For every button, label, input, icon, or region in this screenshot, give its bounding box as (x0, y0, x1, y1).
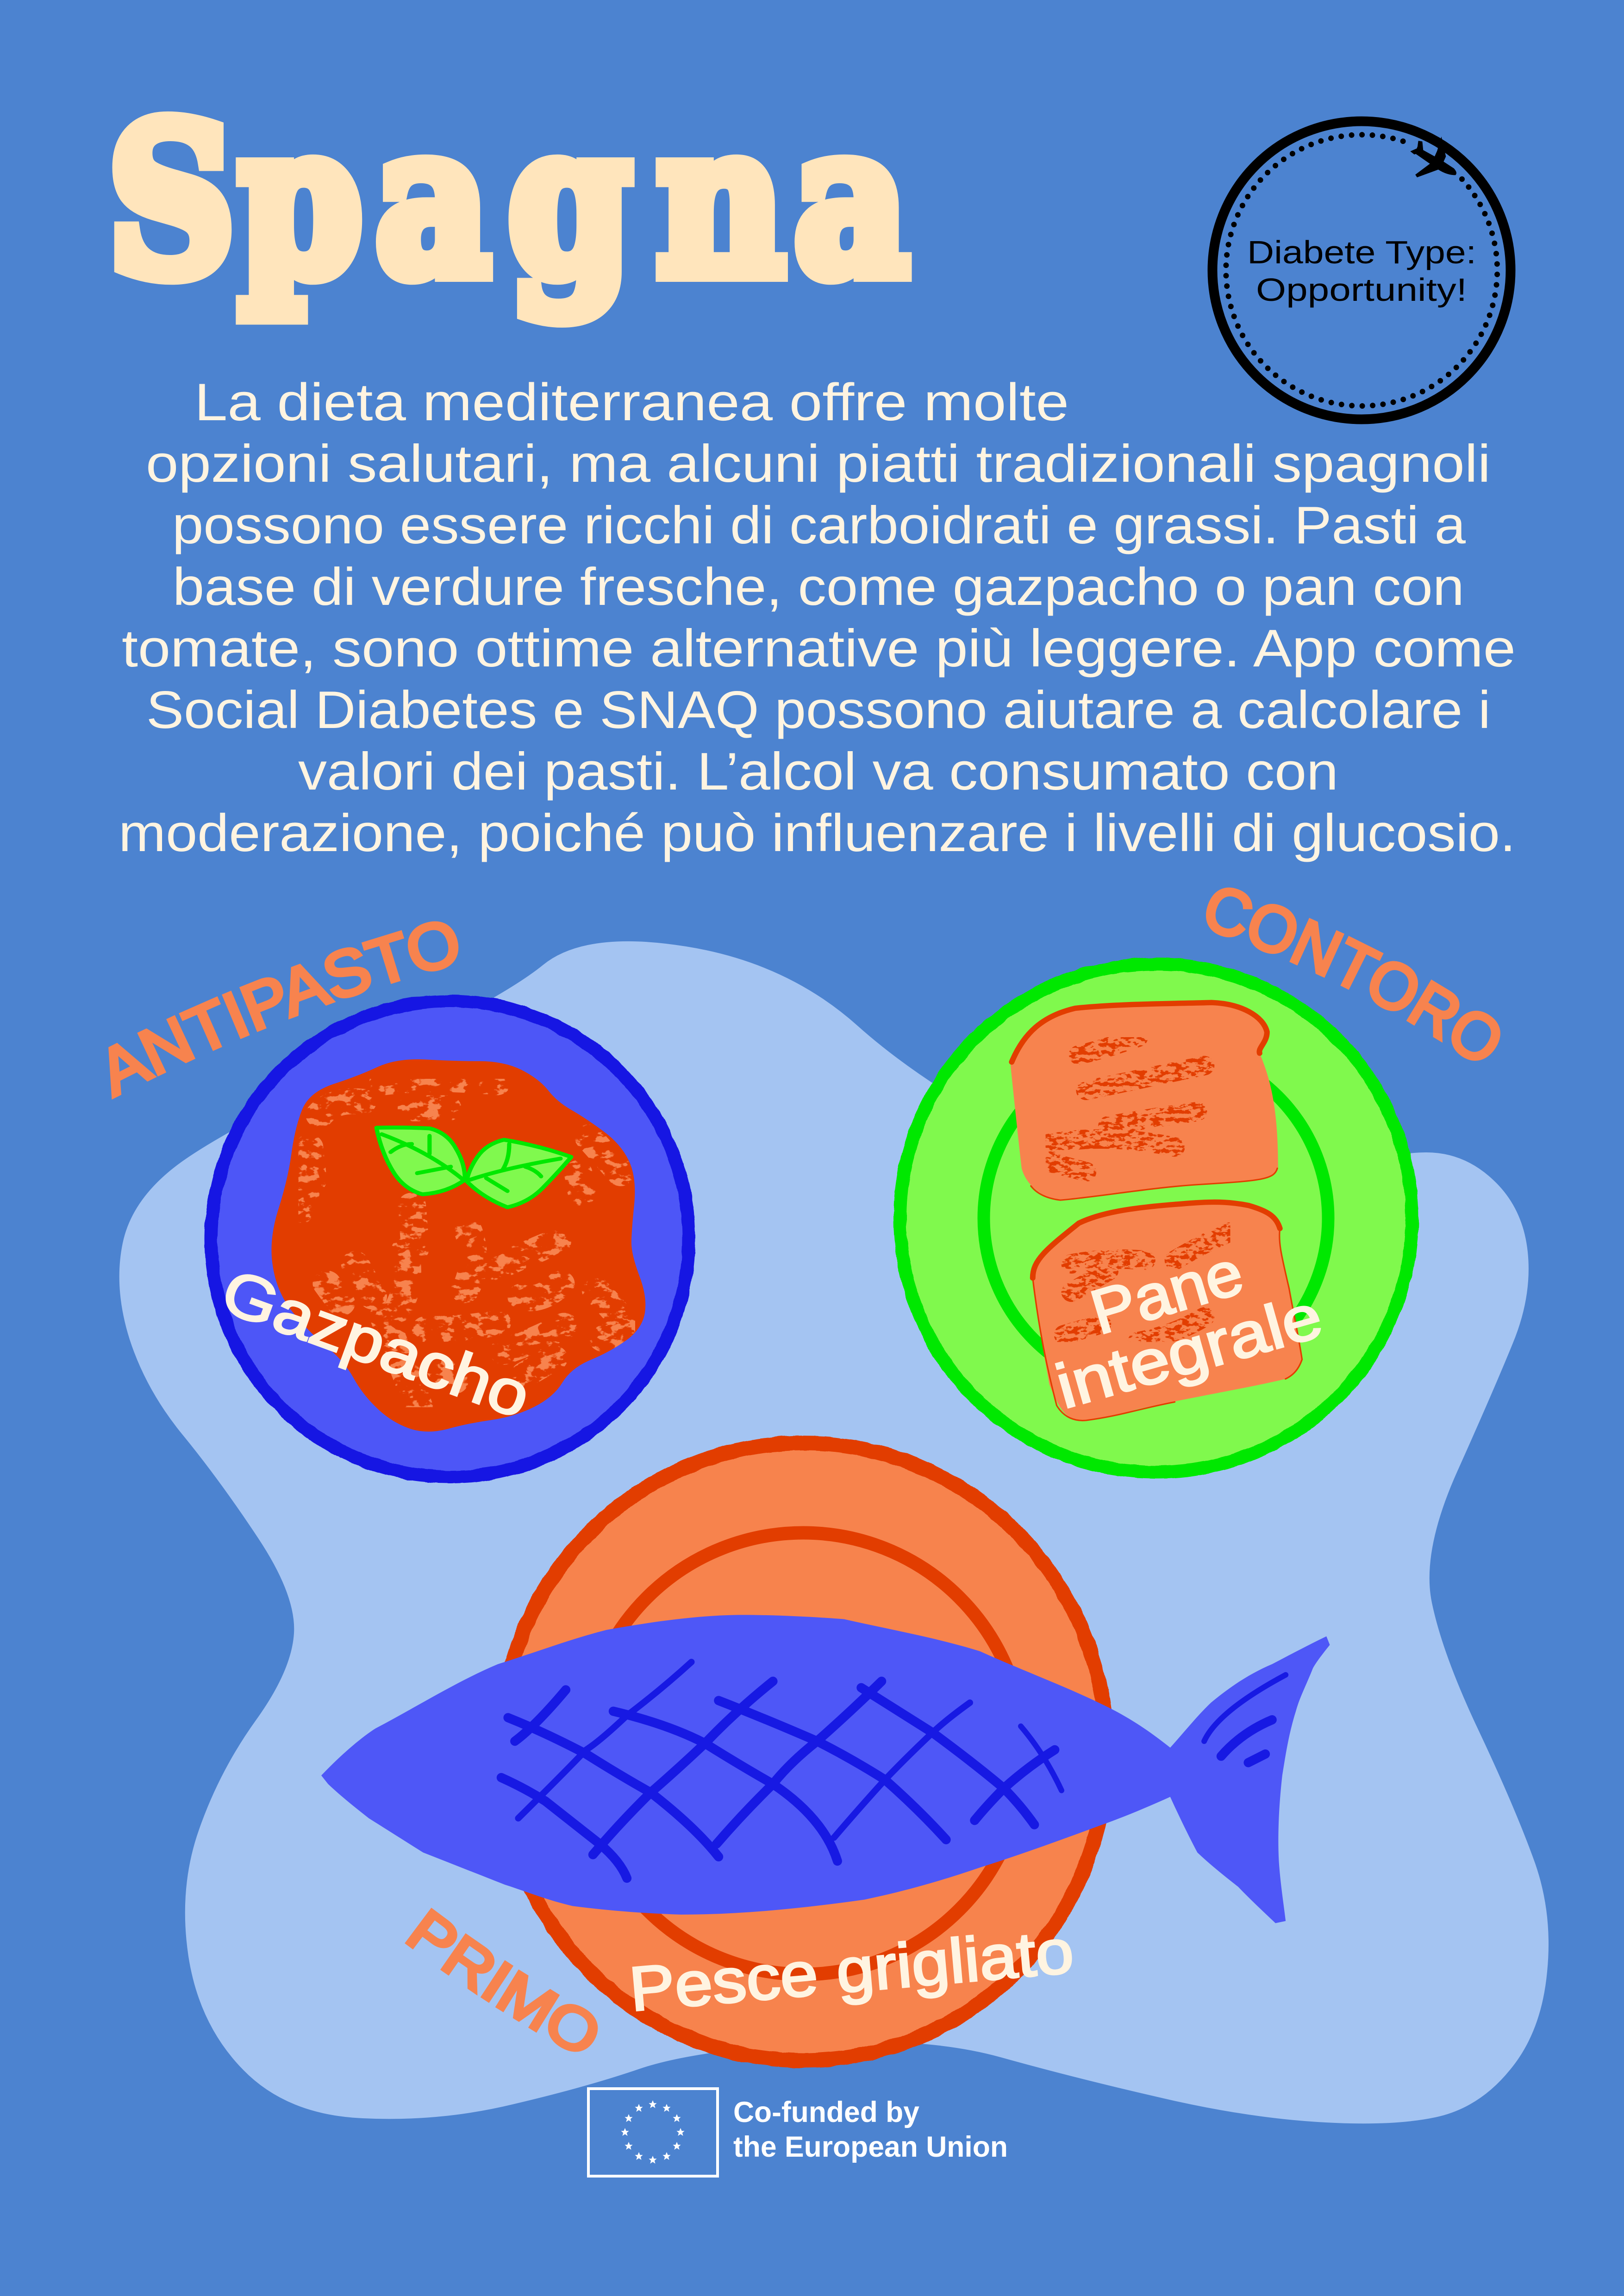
EU text: the European Union (733, 2131, 1008, 2163)
intro text block: opzioni salutari, ma alcuni piatti tradizionali spagnoli (146, 435, 1491, 493)
EU co-funded logo (588, 2089, 1008, 2176)
panel: contorno plate with bread (900, 870, 1516, 1472)
fish grill marks (501, 1662, 1286, 1878)
title: Spagna (108, 80, 908, 322)
orange plate (500, 1443, 1107, 2060)
badge ring (1212, 121, 1511, 419)
EU flag outline (588, 2089, 718, 2176)
intro text block: valori dei pasti. L’alcol va consumato con (298, 742, 1338, 801)
bread slices (1011, 1002, 1302, 1421)
EU stars (621, 2100, 685, 2164)
fish (321, 1615, 1330, 1923)
badge: Diabete Type Opportunity (1212, 121, 1511, 419)
badge: Diabete Type Opportunity: Opportunity! (1256, 272, 1467, 308)
light blue background blob (119, 941, 1549, 2123)
antipasto heading: ANTIPASTO (87, 904, 468, 1109)
pesce grigliato label: Pesce grigliato (626, 1916, 1076, 2024)
pane integrale label: Pane (1083, 1237, 1251, 1348)
green plate inner ring (984, 1046, 1328, 1390)
EU text: Co-funded by (733, 2096, 919, 2128)
primo heading: PRIMO (395, 1897, 612, 2070)
intro text block: Social Diabetes e SNAQ possono aiutare a calcolare i (146, 681, 1491, 740)
intro text block: moderazione, poiché può influenzare i livelli di glucosio. (119, 804, 1516, 863)
panel: antipasto plate with gazpacho (87, 904, 689, 1477)
intro text block: La dieta mediterranea offre molte (194, 373, 1069, 432)
icon: airplane (1410, 137, 1456, 177)
gazpacho label: Gazpacho (213, 1256, 539, 1431)
blue plate (211, 1001, 689, 1477)
pane integrale label: integrale (1049, 1281, 1330, 1422)
badge text: Diabete Type: (1247, 234, 1476, 270)
intro text block: base di verdure fresche, come gazpacho o pan con (173, 558, 1464, 616)
orange plate inner ring (582, 1533, 1024, 1974)
basil leaves (376, 1127, 571, 1207)
badge dotted flight path (1226, 135, 1497, 406)
EU text (733, 2096, 1008, 2163)
panel: primo plate with grilled fish (321, 1443, 1330, 2070)
pane integrale label (1049, 1237, 1330, 1422)
intro text block: possono essere ricchi di carboidrati e grassi. Pasti a (172, 496, 1466, 555)
intro text block: tomate, sono ottime alternative più leggere. App come (122, 619, 1516, 678)
intro text block (119, 373, 1516, 863)
contorno heading: CONTORO (1194, 870, 1516, 1079)
green plate (900, 964, 1412, 1472)
gazpacho soup (271, 1059, 645, 1431)
